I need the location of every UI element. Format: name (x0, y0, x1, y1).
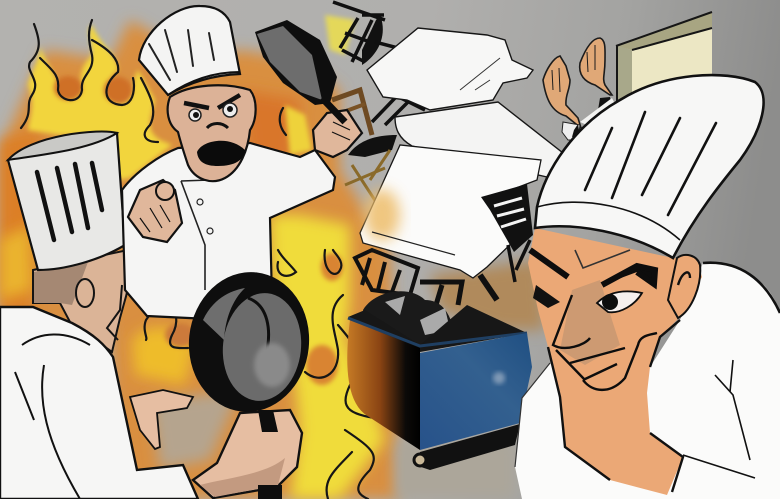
hat (535, 75, 764, 258)
head (33, 250, 130, 352)
chair: under top table (372, 95, 425, 125)
ear (668, 255, 700, 318)
flame holes (54, 76, 82, 100)
nose shadow (560, 280, 620, 365)
chair: bottom (355, 250, 418, 295)
stacked white tables (360, 28, 563, 278)
chairs (332, 2, 497, 305)
eyes (533, 285, 560, 308)
chair: top (333, 2, 385, 62)
raised hand (313, 110, 362, 157)
eyebrows (530, 250, 655, 285)
head (168, 85, 256, 181)
mouth (197, 141, 245, 166)
rubbish (363, 291, 455, 345)
face and neck (528, 228, 702, 495)
fire: orange glow (0, 20, 545, 499)
hat (139, 6, 240, 95)
flame outlines (21, 20, 388, 499)
nose (207, 124, 228, 128)
pointing hand (128, 180, 182, 242)
body (122, 143, 335, 320)
right chef (515, 75, 780, 499)
body (0, 307, 198, 499)
arm holding pan (193, 410, 302, 498)
brows (184, 95, 240, 108)
dumpster (347, 291, 532, 470)
centre chef (122, 6, 362, 320)
door frame (616, 12, 712, 106)
raised hands (543, 38, 615, 140)
eyes (189, 109, 201, 121)
body (515, 263, 780, 499)
chair: wooden (332, 90, 372, 135)
fire: yellow flames (0, 15, 388, 499)
hat (8, 133, 125, 270)
open hand (130, 390, 193, 449)
nose and smile (553, 295, 657, 390)
chair over table (481, 184, 533, 282)
frying pan: upper (255, 20, 345, 122)
frying pan: lower (182, 266, 316, 499)
left chef (0, 131, 302, 499)
